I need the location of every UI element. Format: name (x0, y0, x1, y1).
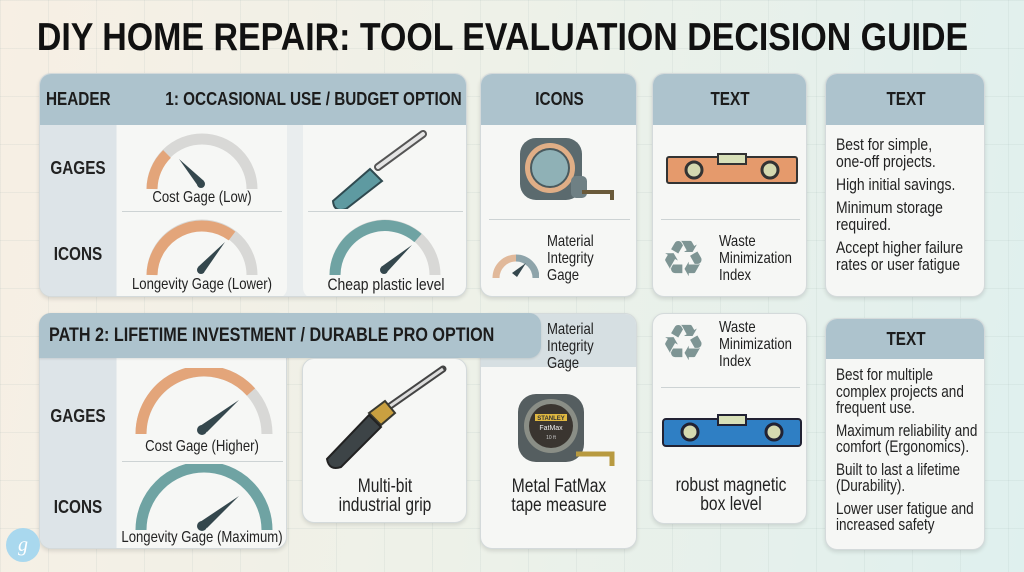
gauge: longevity lower (146, 220, 258, 276)
text: waste minimization index: Waste (719, 319, 756, 336)
icon: orange level (666, 153, 798, 184)
panel: icons column bottom (480, 313, 637, 549)
cell: screwdriver and plastic level: Cheap plastic level (327, 275, 445, 294)
text: multi-bit: Multi-bit (358, 476, 412, 497)
gauge: cost higher (136, 368, 272, 435)
header: path 1: 1: OCCASIONAL USE / BUDGET OPTION (166, 89, 462, 109)
text: robust magnetic box level: box level (700, 494, 762, 515)
icon: recycle: ♻ (661, 230, 706, 288)
title: DIY HOME REPAIR: TOOL EVALUATION DECISION GUIDE (37, 16, 968, 59)
text: waste minimization index: Index (719, 353, 751, 370)
icon: industrial screwdriver (326, 366, 446, 469)
header: text: TEXT (711, 89, 750, 109)
header: text (826, 74, 986, 125)
panel: path 1 budget option (39, 73, 467, 297)
panel: pro screwdriver (302, 358, 467, 523)
header: text (653, 74, 808, 125)
cell: budget gauges: Cost Gage (Low) (152, 189, 252, 206)
icon: tape measure (520, 138, 614, 200)
icon: fatmax tape measure: STANLEY (537, 416, 565, 422)
icon: material integrity gauge (492, 254, 539, 278)
icon: fatmax tape measure (518, 394, 614, 466)
text: budget notes: Best for simple, (836, 135, 932, 154)
text: multi-bit (339, 476, 431, 516)
text: waste minimization index: Minimization (719, 250, 792, 267)
icon: screwdriver (332, 130, 427, 209)
text: waste minimization index (719, 233, 792, 284)
text: material integrity gage: Material (547, 321, 594, 338)
label: gages: GAGES (50, 158, 106, 178)
text: waste minimization index: Minimization (719, 336, 792, 353)
panel: pro level (652, 313, 807, 524)
panel: path 2 gauges: Cost Gage (Higher) (145, 438, 259, 455)
label: gages: GAGES (50, 406, 106, 426)
icon: logo (6, 528, 40, 562)
icon: fatmax tape measure: FatMax (539, 425, 563, 432)
label: icons: ICONS (54, 244, 102, 264)
header: text (826, 319, 986, 359)
text: pro notes: increased safety (836, 516, 935, 534)
text: budget notes: rates or user fatigue (836, 255, 960, 274)
header: path 1 (40, 74, 468, 125)
panel: text column top (notes) (825, 73, 985, 297)
panel: path 2 gauges (39, 313, 287, 549)
gauge: cost low (146, 134, 258, 190)
gauge: longevity maximum (136, 464, 272, 531)
text: material integrity gage: Gage (547, 267, 579, 284)
text: metal fatmax (511, 476, 607, 516)
text: pro notes (836, 366, 977, 534)
text: metal fatmax: tape measure (511, 495, 607, 516)
text: waste minimization index (719, 319, 792, 370)
label: icons: ICONS (54, 497, 102, 517)
text: material integrity gage: Integrity (547, 250, 594, 267)
text: multi-bit: industrial grip (339, 495, 431, 516)
text: pro notes: Best for multiple (836, 366, 933, 384)
cell: budget gauges: Longevity Gage (Lower) (132, 276, 272, 293)
text: material integrity gage: Material (547, 233, 594, 250)
icon: fatmax tape measure: 10 ft (546, 435, 556, 441)
text: budget notes: one-off projects. High initial savings. Minimum storage (836, 152, 955, 217)
panel: icons column top (480, 73, 637, 297)
text: material integrity gage (547, 321, 594, 372)
header: text: TEXT (886, 329, 926, 349)
text: budget notes: required. Accept higher failure (836, 215, 963, 257)
text: pro notes: (Durability). Lower user fatigue and (836, 477, 974, 518)
text: metal fatmax: Metal FatMax (512, 476, 606, 497)
icon: logo: g (18, 534, 28, 556)
text: material integrity gage: Integrity (547, 338, 594, 355)
panel: pro notes (825, 318, 985, 550)
header: path 1: HEADER (46, 89, 111, 109)
gauge: cheap plastic level (330, 220, 440, 275)
header: path 2 (39, 313, 541, 358)
text: material integrity gage: Gage (547, 355, 579, 372)
text: pro notes: complex projects and (836, 382, 964, 400)
header: icons: ICONS (535, 89, 584, 109)
text: material integrity gage (547, 233, 594, 284)
icon: blue magnetic level (662, 414, 802, 447)
panel: text column top (level) (652, 73, 807, 297)
panel: path 2 gauges: Longevity Gage (Maximum) (121, 529, 283, 546)
text: robust magnetic box level (676, 475, 786, 515)
icon: recycle: ♻ (661, 314, 706, 372)
label column (40, 125, 116, 298)
text: budget notes (836, 135, 963, 274)
text: waste minimization index: Waste (719, 233, 756, 250)
header: text: TEXT (886, 89, 926, 109)
text: waste minimization index: Index (719, 267, 751, 284)
text: robust magnetic box level: robust magnetic (676, 475, 786, 496)
cell: screwdriver and plastic level (303, 125, 468, 298)
text: pro notes: comfort (Ergonomics). Built to last a lifetime (836, 438, 969, 478)
cell: budget gauges (117, 125, 287, 298)
text: pro notes: frequent use. Maximum reliability and (836, 399, 977, 440)
header: path 2: PATH 2: LIFETIME INVESTMENT / DURABLE PRO OPTION (49, 325, 494, 346)
label column (40, 358, 116, 550)
header: icons (481, 74, 638, 125)
